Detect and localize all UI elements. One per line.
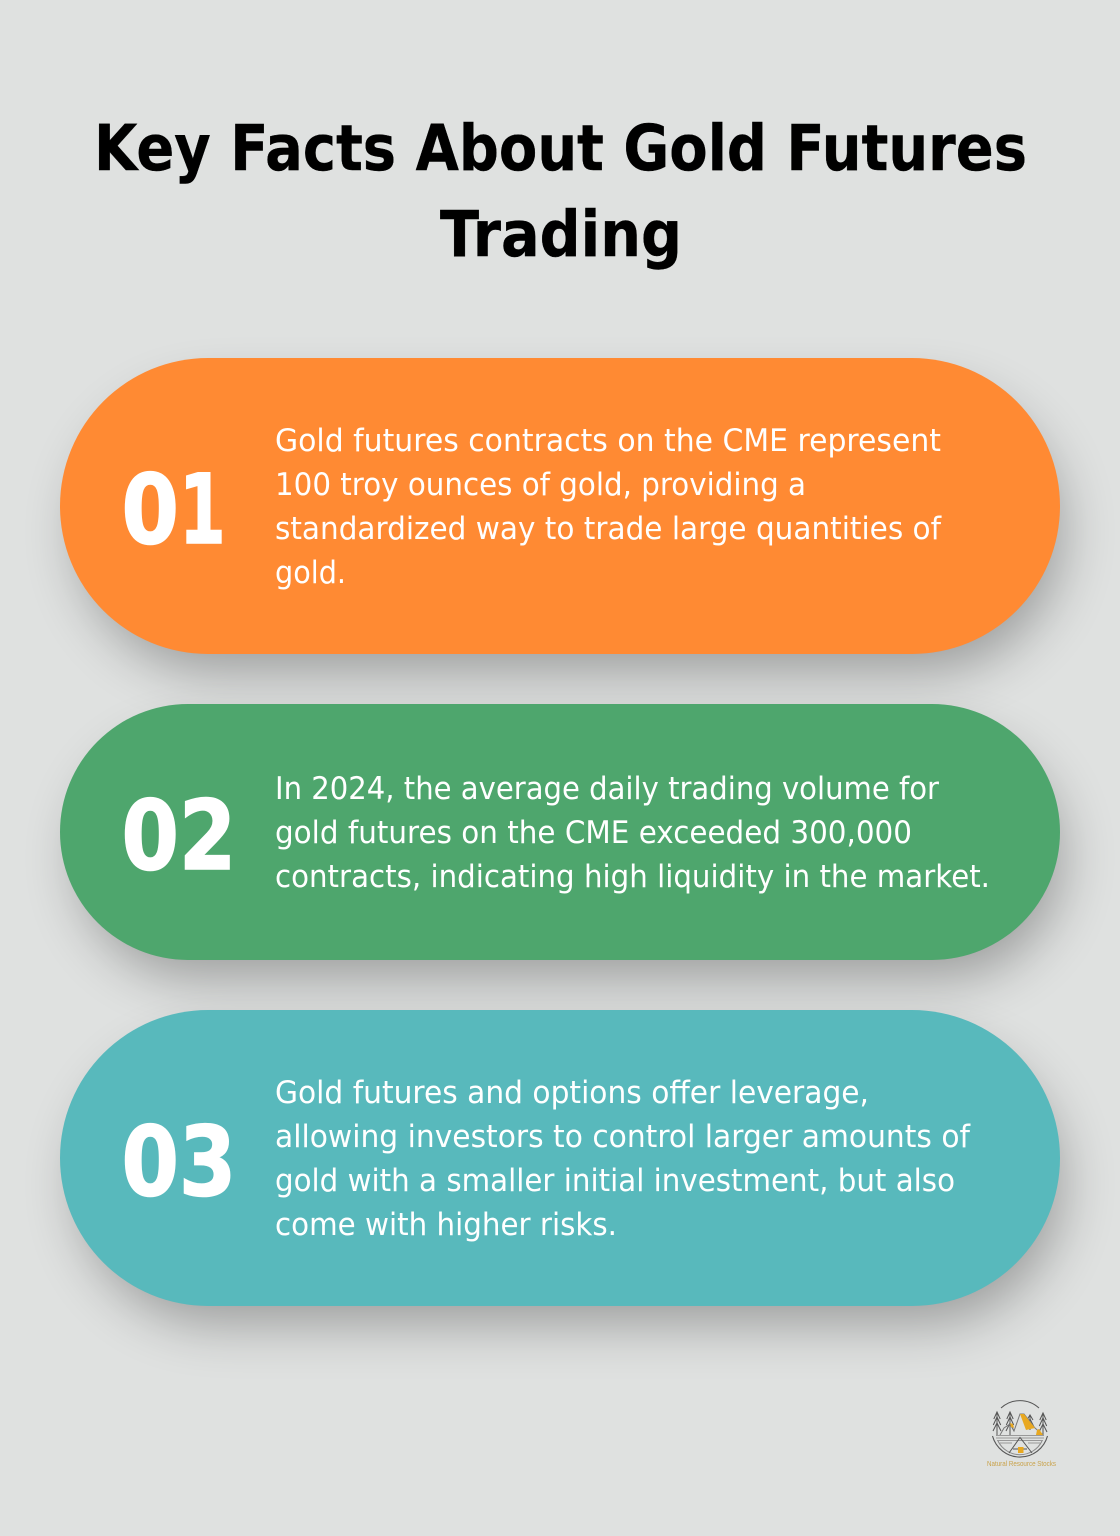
title: Key Facts About Gold Futures [94,112,1027,185]
text block: fact 03: allowing investors to control larger amounts of [275,1119,971,1155]
text block: fact 01 [275,423,942,591]
icon: gold mountain highlights [1010,1414,1043,1453]
title: Trading [440,198,682,271]
number 01: 0 [122,455,179,567]
number 02: 02 [122,781,236,893]
text block: fact 02: In 2024, the average daily trading volume for [275,771,939,807]
text block: fact 03: Gold futures and options offer leverage, [275,1075,869,1111]
text block: fact 03: gold with a smaller initial investment, but also [275,1163,955,1199]
number 03: 03 [122,1107,236,1219]
title [94,112,1027,271]
text block: fact 02: gold futures on the CME exceeded 300,000 [275,815,912,851]
number 01: 1 [179,454,226,566]
panel: fact 01 background [60,358,1060,654]
logo: Natural Resource Stocks [987,1401,1056,1468]
panel: fact 02 background [60,704,1060,960]
text block: fact 02: contracts, indicating high liquidity in the market. [275,859,990,895]
text block: fact 03 [275,1075,971,1243]
text block: fact 01: 100 troy ounces of gold, providing a [275,467,806,503]
logo wordmark: Natural Resource Stocks [987,1459,1056,1468]
text block: fact 02 [275,771,990,895]
text block: fact 01: Gold futures contracts on the CME represent [275,423,941,459]
text block: fact 01: gold. [275,555,346,591]
icon: circle emblem with trees, mountains and cabin [992,1401,1048,1457]
panel: fact 03 background [60,1010,1060,1306]
text block: fact 03: come with higher risks. [275,1207,617,1243]
number 01 [122,454,226,567]
text block: fact 01: standardized way to trade large quantities of [275,511,942,547]
